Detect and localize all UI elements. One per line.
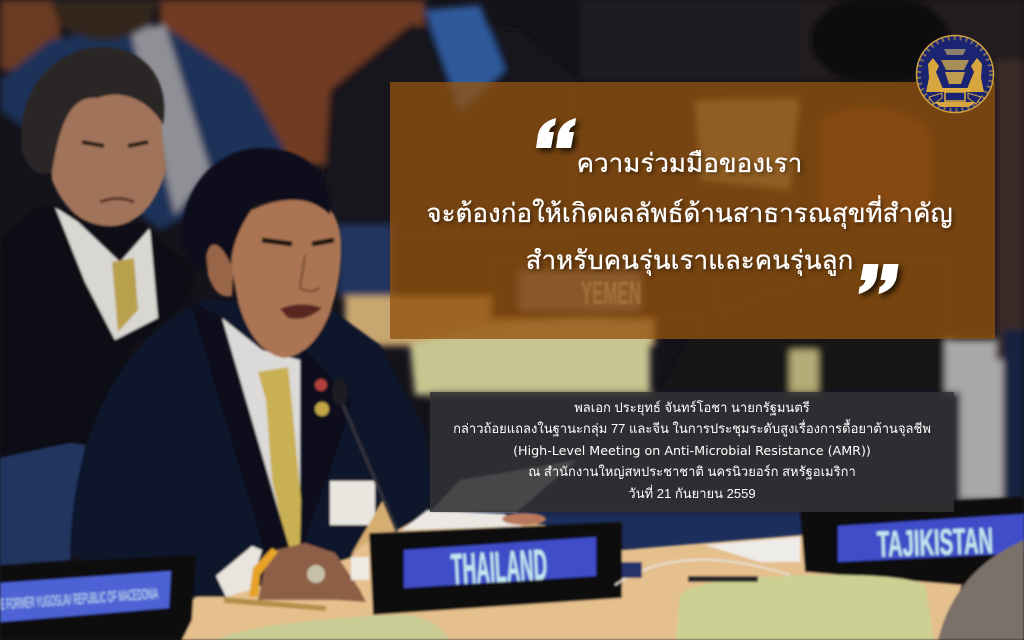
caption line: meeting name: (High-Level Meeting on Anti-Microbial Resistance (AMR)) <box>513 443 871 458</box>
caption line: venue: ณ สำนักงานใหญ่สหประชาชาติ นครนิวยอร์ก สหรัฐอเมริกา <box>528 464 856 479</box>
quote text line 3: สำหรับคนรุ่นเราและคนรุ่นลูก <box>526 245 853 275</box>
speaker hand and sleeve <box>216 543 369 611</box>
nameplate: Macedonia <box>0 555 196 640</box>
panel: event caption <box>430 392 954 512</box>
paper under caption panel <box>430 460 577 512</box>
microphone <box>332 378 397 531</box>
icon: opening quotation mark <box>536 118 582 154</box>
nameplate: Tajikistan <box>800 497 1024 585</box>
caption line: occasion: กล่าวถ้อยแถลงในฐานะกลุ่ม 77 และจีน ในการประชุมระดับสูงเรื่องการดื้อยาต้านจุลชีพ <box>453 421 931 436</box>
nameplate: Thailand <box>369 522 622 615</box>
blue chair behind speaker <box>0 443 85 565</box>
desk surface <box>180 500 962 640</box>
icon: closing quotation mark <box>858 264 904 300</box>
tan desk wedge beside jacket <box>351 500 396 555</box>
panel: quote <box>390 82 995 339</box>
speaker body <box>70 148 546 597</box>
quote text line 2: จะต้องก่อให้เกิดผลลัพธ์ด้านสาธารณสุขที่สำคัญ <box>426 198 953 228</box>
caption line: speaker: พลเอก ประยุทธ์ จันทร์โอชา นายกรัฐมนตรี <box>574 400 810 415</box>
YEMEN nameplate behind quote panel: YEMEN <box>581 275 641 311</box>
icon: government seal <box>916 34 994 114</box>
nameplate: Thailand: THAILAND <box>450 541 548 594</box>
caption line: date: วันที่ 21 กันยายน 2559 <box>628 486 756 501</box>
quote text line 1: ความร่วมมือของเรา <box>577 148 802 178</box>
foreground chairs <box>676 575 934 640</box>
nameplate: Macedonia: E FORMER YUGOSLAV REPUBLIC OF MACEDONIA <box>0 585 159 613</box>
left delegate <box>0 47 195 460</box>
